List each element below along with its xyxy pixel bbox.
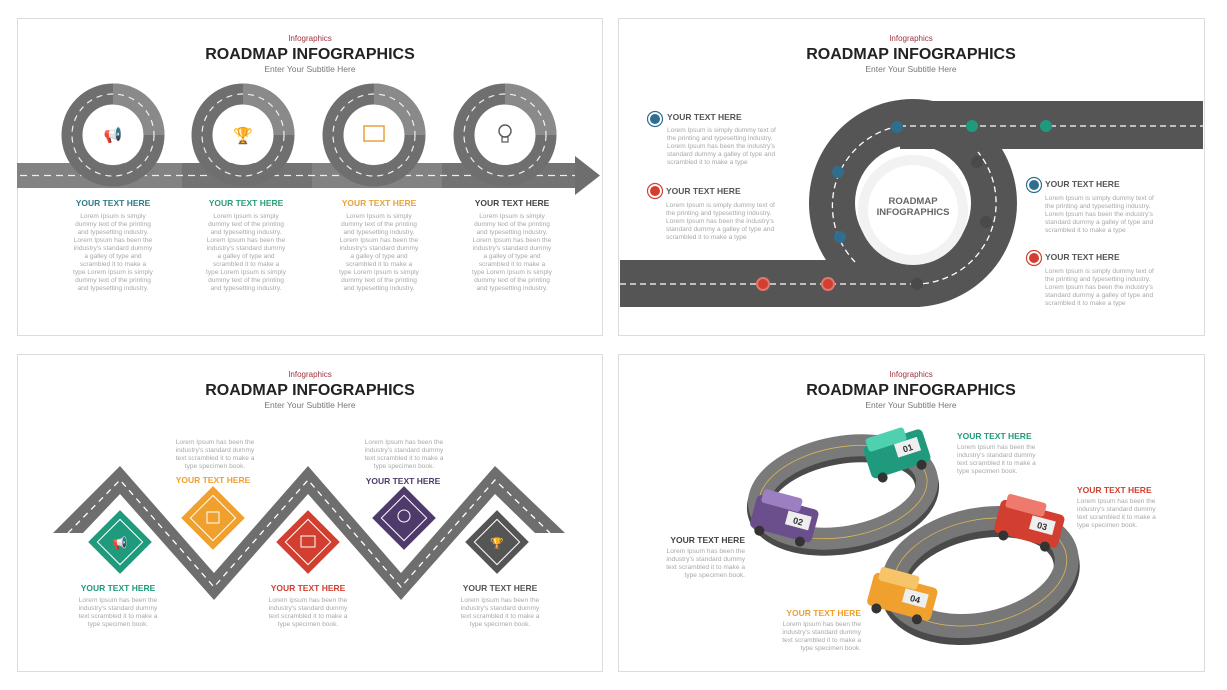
text columns: dummy text of the printing (75, 277, 151, 284)
title block 4: Infographics (889, 370, 933, 379)
zigzag texts: industry's standard dummy (269, 605, 348, 612)
text blocks (648, 112, 1154, 307)
text blocks: Lorem Ipsum has been the industry's (666, 218, 775, 225)
text blocks: Lorem Ipsum has been the industry's (1045, 211, 1154, 218)
zigzag texts: Lorem Ipsum has been the (461, 597, 540, 604)
text blocks: Lorem Ipsum is simply dummy text of (666, 202, 775, 209)
title block 4: Enter Your Subtitle Here (865, 400, 957, 410)
text columns: and typesetting industry. (78, 285, 149, 292)
car texts: Lorem Ipsum has been the (1077, 498, 1156, 505)
car texts: text scrambled it to make a (1077, 514, 1156, 521)
zigzag texts: type specimen book. (374, 463, 434, 470)
loops with icons: 📢 (104, 126, 122, 144)
zigzag texts: Lorem Ipsum has been the (365, 439, 444, 446)
text blocks: the printing and typesetting industry. (1045, 276, 1151, 283)
car texts: type specimen book. (1077, 522, 1138, 529)
text blocks: the printing and typesetting industry. (1045, 203, 1151, 210)
title block 1: Infographics (288, 34, 332, 43)
cars: 04 (909, 593, 921, 605)
zigzag texts: text scrambled it to make a (79, 613, 158, 620)
zigzag texts: Lorem Ipsum has been the (176, 439, 255, 446)
text blocks: Lorem Ipsum is simply dummy text of (1045, 195, 1154, 202)
text columns: dummy text of the printing (208, 221, 284, 228)
zigzag texts (79, 439, 540, 628)
title block 3: ROADMAP INFOGRAPHICS (205, 382, 415, 399)
text columns: dummy text of the printing (75, 221, 151, 228)
text columns: Lorem Ipsum has been the (207, 237, 286, 244)
title block 3: Infographics (288, 370, 332, 379)
car texts: industry's standard dummy (957, 452, 1036, 459)
text columns: dummy text of the printing (208, 277, 284, 284)
figure eight road (751, 433, 1077, 647)
zigzag texts: YOUR TEXT HERE (366, 476, 441, 486)
text columns: Lorem Ipsum is simply (346, 213, 412, 220)
zigzag texts: type specimen book. (278, 621, 338, 628)
zigzag texts: text scrambled it to make a (461, 613, 540, 620)
text columns: industry's standard dummy (340, 245, 419, 252)
car texts: industry's standard dummy (666, 556, 746, 563)
text columns: Lorem Ipsum is simply (80, 213, 146, 220)
text columns: and typesetting industry. (78, 229, 149, 236)
text columns: type Lorem Ipsum is simply (339, 269, 420, 276)
text columns: dummy text of the printing (341, 221, 417, 228)
text columns: type Lorem Ipsum is simply (73, 269, 154, 276)
zigzag texts: industry's standard dummy (176, 447, 255, 454)
text blocks: YOUR TEXT HERE (667, 112, 742, 122)
zigzag texts: industry's standard dummy (79, 605, 158, 612)
zigzag texts: YOUR TEXT HERE (176, 475, 251, 485)
loops with icons (72, 94, 546, 176)
text columns: Lorem Ipsum is simply (479, 213, 545, 220)
text columns: type Lorem Ipsum is simply (472, 269, 553, 276)
loop road: INFOGRAPHICS (877, 207, 949, 218)
zigzag texts: type specimen book. (470, 621, 530, 628)
title block 2: ROADMAP INFOGRAPHICS (806, 46, 1016, 63)
text blocks: Lorem Ipsum is simply dummy text of (1045, 268, 1154, 275)
car texts: type specimen book. (801, 645, 861, 652)
text columns: a galley of type and (217, 253, 275, 260)
car texts: Lorem Ipsum has been the (957, 444, 1036, 451)
loops with icons: 🏆 (233, 126, 253, 145)
title block 4 (806, 370, 1016, 410)
text columns: and typesetting industry. (344, 285, 415, 292)
car texts: text scrambled it to make a (666, 564, 745, 571)
text columns: Lorem Ipsum is simply (213, 213, 279, 220)
zigzag texts: Lorem Ipsum has been the (269, 597, 348, 604)
zigzag texts: YOUR TEXT HERE (463, 583, 538, 593)
text columns: a galley of type and (483, 253, 541, 260)
zigzag texts: Lorem Ipsum has been the (79, 597, 158, 604)
diamonds: 🏆 (490, 537, 504, 550)
zigzag texts: industry's standard dummy (461, 605, 540, 612)
diamonds: 📢 (113, 536, 128, 550)
title block 3: Enter Your Subtitle Here (264, 400, 356, 410)
text blocks: standard dummy a galley of type and (667, 151, 775, 158)
zigzag texts: text scrambled it to make a (269, 613, 348, 620)
text columns: type Lorem Ipsum is simply (206, 269, 287, 276)
text columns: and typesetting industry. (476, 229, 548, 236)
text columns: and typesetting industry. (476, 285, 548, 292)
text columns: Lorem Ipsum has been the (74, 237, 153, 244)
car texts: Lorem Ipsum has been the (667, 548, 745, 555)
zigzag texts: YOUR TEXT HERE (271, 583, 346, 593)
title block 1 (205, 34, 415, 74)
text blocks: Lorem Ipsum has been the industry's (667, 143, 776, 150)
text blocks: YOUR TEXT HERE (666, 186, 741, 196)
car texts: YOUR TEXT HERE (957, 431, 1032, 441)
text columns: and typesetting industry. (344, 229, 415, 236)
car texts: Lorem Ipsum has been the (783, 621, 861, 628)
text columns: dummy text of the printing (341, 277, 417, 284)
text blocks: the printing and typesetting industry. (666, 210, 772, 217)
text columns: YOUR TEXT HERE (76, 198, 151, 208)
zigzag texts: text scrambled it to make a (176, 455, 255, 462)
panel: circular loops roadmap (17, 18, 602, 336)
text columns: Lorem Ipsum has been the (473, 237, 552, 244)
cars (747, 421, 1067, 628)
text blocks: standard dummy a galley of type and (1045, 292, 1153, 299)
text columns: YOUR TEXT HERE (209, 198, 284, 208)
title block 3 (205, 370, 415, 410)
zigzag texts: YOUR TEXT HERE (81, 583, 156, 593)
car texts: YOUR TEXT HERE (1077, 485, 1152, 495)
text columns: industry's standard dummy (207, 245, 286, 252)
text columns: scrambled it to make a (479, 261, 545, 268)
panel: figure eight cars (618, 354, 1204, 672)
text blocks: scrambled it to make a type (1045, 227, 1126, 234)
text columns (73, 198, 553, 292)
cars: 03 (1036, 520, 1048, 532)
text columns: a galley of type and (84, 253, 142, 260)
text columns: YOUR TEXT HERE (342, 198, 417, 208)
text blocks: Lorem Ipsum is simply dummy text of (667, 127, 776, 134)
text blocks: scrambled it to make a type (666, 234, 747, 241)
title block 2: Infographics (889, 34, 933, 43)
text columns: and typesetting industry. (210, 229, 282, 236)
text columns: scrambled it to make a (80, 261, 146, 268)
car texts: industry's standard dummy (782, 629, 862, 636)
car texts: industry's standard dummy (1077, 506, 1156, 513)
car texts: YOUR TEXT HERE (670, 535, 745, 545)
panel: loop road roadmap (618, 18, 1204, 336)
text blocks: standard dummy a galley of type and (1045, 219, 1153, 226)
text columns: YOUR TEXT HERE (475, 198, 550, 208)
zigzag texts: type specimen book. (88, 621, 148, 628)
diamonds (86, 484, 531, 576)
text columns: scrambled it to make a (346, 261, 412, 268)
cars: 01 (902, 442, 914, 455)
car texts: text scrambled it to make a (957, 460, 1036, 467)
text blocks: scrambled it to make a type (1045, 300, 1126, 307)
loop road (620, 101, 1203, 307)
zigzag texts: text scrambled it to make a (365, 455, 444, 462)
text blocks: the printing and typesetting industry. (667, 135, 773, 142)
zigzag texts: industry's standard dummy (365, 447, 444, 454)
text columns: industry's standard dummy (473, 245, 552, 252)
text columns: dummy text of the printing (474, 277, 550, 284)
milestone dots (757, 120, 1052, 290)
loop road: ROADMAP (888, 196, 938, 207)
car texts: type specimen book. (957, 468, 1018, 475)
panel: zigzag roadmap (18, 354, 602, 672)
zigzag road (53, 466, 565, 600)
zigzag texts: type specimen book. (185, 463, 245, 470)
text columns: scrambled it to make a (213, 261, 279, 268)
car texts: YOUR TEXT HERE (786, 608, 861, 618)
text columns: a galley of type and (350, 253, 408, 260)
title block 1: ROADMAP INFOGRAPHICS (205, 46, 415, 63)
car texts: text scrambled it to make a (782, 637, 861, 644)
text blocks: YOUR TEXT HERE (1045, 252, 1120, 262)
cars: 02 (792, 515, 804, 528)
title block 1: Enter Your Subtitle Here (264, 64, 356, 74)
title block 2 (806, 34, 1016, 74)
car texts (666, 431, 1156, 652)
title block 4: ROADMAP INFOGRAPHICS (806, 382, 1016, 399)
car texts: type specimen book. (685, 572, 745, 579)
text columns: industry's standard dummy (74, 245, 153, 252)
title block 2: Enter Your Subtitle Here (865, 64, 957, 74)
text blocks: standard dummy a galley of type and (666, 226, 774, 233)
text blocks: scrambled it to make a type (667, 159, 748, 166)
text blocks: YOUR TEXT HERE (1045, 179, 1120, 189)
text blocks: Lorem Ipsum has been the industry's (1045, 284, 1154, 291)
road with arrow (17, 156, 600, 195)
text columns: dummy text of the printing (474, 221, 550, 228)
text columns: Lorem Ipsum has been the (340, 237, 419, 244)
text columns: and typesetting industry. (210, 285, 282, 292)
